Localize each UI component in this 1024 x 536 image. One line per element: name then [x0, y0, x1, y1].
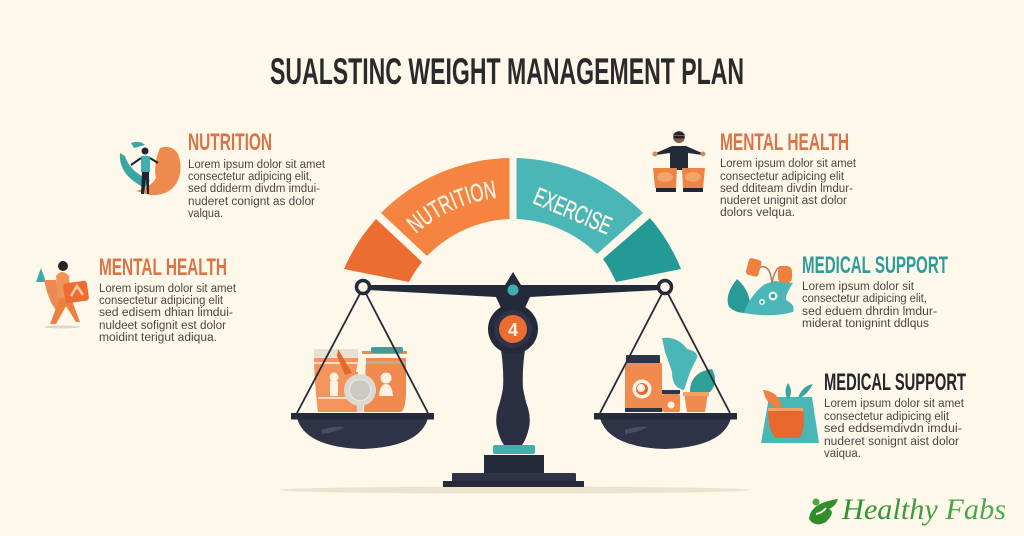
panel: medical support (teal) — [728, 252, 948, 330]
text block: sed dditeam divdin lmdur- — [720, 183, 853, 195]
medallion number — [488, 304, 538, 354]
ground shadow — [279, 486, 751, 494]
right pan contents: jars and plant — [625, 338, 715, 412]
arc segment: dark teal — [603, 218, 681, 282]
text block: sed ddiderm divdm imdui- — [188, 183, 320, 195]
text block: consectetur adipicing elit — [99, 295, 224, 307]
panel: medical support (black) — [761, 369, 966, 460]
text block: dolors velqua. — [720, 207, 795, 219]
balance scale — [291, 272, 737, 487]
text block: nuderet sonignt aist dolor — [824, 436, 959, 448]
text block: miderat tonignint ddlqus — [802, 318, 929, 330]
heading: MENTAL HEALTH — [720, 129, 849, 156]
icon: person carrying box — [36, 261, 89, 328]
text block: consectetur adipicing elit, — [802, 293, 927, 305]
left pan contents: jars — [314, 347, 407, 412]
text block: consectetur adipicing elit, — [188, 171, 312, 183]
text block: Lorem ipsum dolor sit — [802, 281, 915, 293]
text block: sed eddsemdivdn imdui- — [824, 423, 962, 435]
panel: nutrition (top left) — [120, 129, 326, 220]
logo — [809, 493, 1006, 526]
text block: sed eduem dhrdin lmdur- — [802, 306, 937, 318]
text block: vaiqua. — [824, 448, 861, 460]
text block — [802, 281, 937, 330]
arc segment: nutrition — [381, 158, 510, 256]
text block — [99, 283, 237, 344]
left pan — [291, 413, 434, 449]
icon: plant in orange pot — [761, 383, 819, 443]
text block: nuldeet sofignit est dolor — [99, 320, 226, 332]
scale ropes — [297, 288, 730, 413]
text block: Lorem ipsum dolor sit amet — [188, 159, 326, 171]
text block — [720, 158, 857, 219]
text block: nuderet unignit ast dolor — [720, 195, 847, 207]
icon: logo mark — [809, 498, 838, 524]
gauge arc — [344, 158, 681, 282]
medallion number: 4 — [508, 320, 518, 340]
heading: MENTAL HEALTH — [99, 254, 227, 281]
panel: mental health (left) — [36, 254, 237, 344]
arc segment: dark orange — [344, 219, 422, 282]
text block — [188, 159, 326, 220]
icon: figure with two weights — [652, 131, 706, 192]
text block: Lorem ipsum dolor sit amet — [824, 398, 965, 410]
title: SUALSTINC WEIGHT MANAGEMENT PLAN — [270, 51, 744, 92]
arc segment: exercise — [516, 158, 643, 254]
arc segment: nutrition: NUTRITION — [406, 180, 496, 234]
text block: sed edisem dhian limdui- — [99, 307, 233, 319]
scale beam — [356, 272, 672, 310]
icon: person with food ring — [120, 142, 181, 195]
text block: moidint terigut adiqua. — [99, 332, 217, 344]
scale base — [443, 445, 584, 487]
arc segment: exercise: EXERCISE — [529, 182, 616, 240]
text block: nuderet conignt as dolor — [188, 196, 315, 208]
text block: valqua. — [188, 208, 223, 220]
text block: consectetur adipicing elit — [720, 171, 845, 183]
text block: Lorem ipsum dolor sit amet — [99, 283, 237, 295]
heading: NUTRITION — [188, 129, 272, 156]
logo wordmark: Healthy Fabs — [841, 493, 1006, 526]
text block: Lorem ipsum dolor sit amet — [720, 158, 857, 170]
icon: leaf and capsule blob — [728, 257, 794, 315]
text block: consectetur adipicing elit — [824, 411, 950, 423]
text block — [824, 398, 965, 460]
scale column — [496, 350, 530, 445]
panel: mental health (top right) — [652, 129, 857, 219]
right pan — [594, 413, 737, 449]
